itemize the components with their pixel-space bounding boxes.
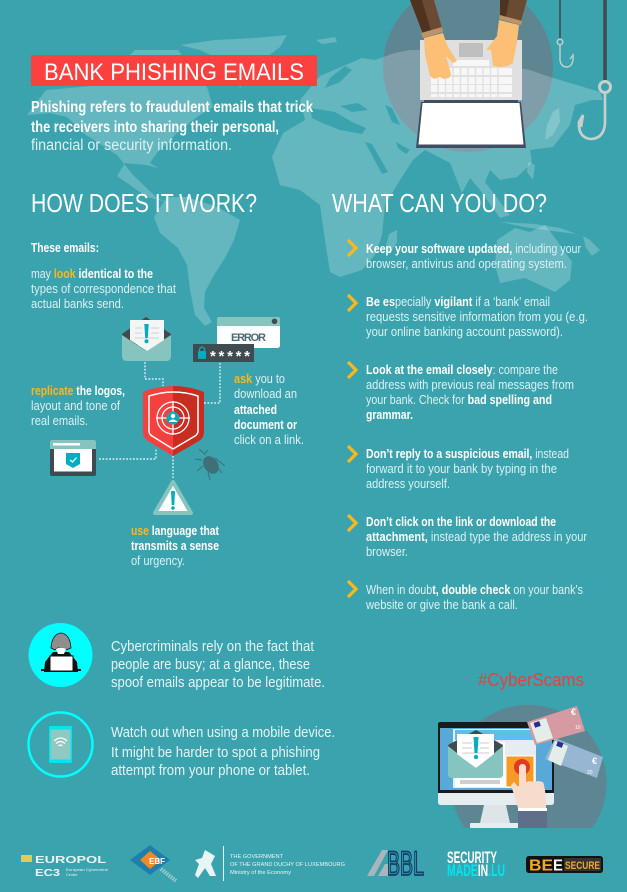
text: ask you to download: attached [234, 402, 277, 417]
advice: look at the email closely: grammar. [366, 407, 413, 422]
advice: double check: When in doubt, double check on your bank’s [366, 582, 583, 597]
text: may look identical: may look identical to the [31, 266, 153, 281]
text: ask you to download: click on a link. [234, 432, 304, 447]
heading: what can you do: WHAT CAN YOU DO? [332, 188, 547, 218]
logo: Government of Luxembourg: Ministry of the Economy [230, 870, 291, 876]
icon: envelope with alert [122, 317, 171, 361]
text: use language: transmits a sense [131, 538, 219, 553]
icon: hacker in cyan circle [28, 623, 92, 687]
icon: small fishing hook [557, 0, 573, 67]
logo: Europol EC3: EUROPOL [35, 854, 107, 866]
advice: do not click: attachment, instead type the address in your [366, 529, 588, 544]
icon: warning triangle [155, 482, 191, 513]
text: mobile warning: Watch out when using a mobile device. [111, 724, 335, 741]
text: may look identical: actual banks send. [31, 296, 124, 311]
advice: keep software updated: browser, antivirus and operating system. [366, 256, 567, 271]
advice: be vigilant [366, 294, 588, 339]
advice: be vigilant: Be especially vigilant if a ‘bank’ email [366, 294, 550, 309]
text: ask you to download: document or [234, 417, 297, 432]
logo: Europol EC3: Centre [66, 873, 77, 877]
illustration: computer with email and banknotes [438, 705, 606, 828]
text: replicate the logos [31, 383, 125, 428]
text: mobile warning [111, 724, 335, 779]
text: mobile warning: It might be harder to spot a phishing [111, 744, 320, 761]
icon: shield with target [143, 386, 204, 456]
logo: Europol EC3: EC3 [35, 868, 61, 879]
advice: do not reply: forward it to your bank by typing in the [366, 461, 557, 476]
advice: be vigilant: your online banking account password). [366, 324, 563, 339]
logo: Government of Luxembourg [195, 846, 345, 881]
text: cybercriminals [111, 638, 325, 691]
text: use language: use language that [131, 523, 219, 538]
advice: do not click [366, 514, 588, 559]
intro text: financial or security information. [31, 137, 232, 154]
text: may look identical [31, 266, 176, 311]
logo: Government of Luxembourg: OF THE GRAND DUCHY OF LUXEMBOURG [230, 862, 345, 868]
text: replicate the logos: layout and tone of [31, 398, 120, 413]
advice: do not reply [366, 446, 569, 491]
advice chevrons [348, 240, 356, 597]
illustration: computer with email and banknotes: 10 [575, 725, 581, 731]
icon: large fishing hook [579, 0, 610, 139]
intro text: Phishing refers to fraudulent emails that trick [31, 99, 313, 116]
heading: how does it work: HOW DOES IT WORK? [31, 188, 257, 218]
advice: look at the email closely: address with previous real messages from [366, 377, 574, 392]
advice: keep software updated: Keep your software updated, including your [366, 241, 581, 256]
dotted connectors [99, 362, 220, 478]
icon: error window with password bar: ***** [210, 348, 250, 365]
logo: Security Made In LU: MADEIN.LU [447, 862, 505, 880]
text: replicate the logos: replicate the logos, [31, 383, 125, 398]
advice: do not reply: address yourself. [366, 476, 450, 491]
text: cybercriminals: Cybercriminals rely on the fact that [111, 638, 315, 655]
advice: do not click: browser. [366, 544, 408, 559]
advice: look at the email closely: Look at the email closely: compare the [366, 362, 558, 377]
logo: Government of Luxembourg: THE GOVERNMENT [230, 854, 284, 860]
advice: be vigilant: requests sensitive information from you (e.g. [366, 309, 588, 324]
illustration: computer with email and banknotes: 20 [587, 770, 593, 776]
logo: ABBL [367, 845, 424, 883]
advice: look at the email closely: your bank. Check for bad spelling and [366, 392, 552, 407]
intro text [31, 99, 313, 154]
icon: bug [195, 449, 225, 480]
illustration: computer with email and banknotes: € [592, 756, 597, 766]
laptop backdrop circle [383, 0, 553, 152]
text: these emails: These emails: [31, 240, 99, 255]
logo: EBF: EBF [149, 857, 165, 866]
advice: do not reply: Don’t reply to a suspicious email, instead [366, 446, 569, 461]
advice: keep software updated [366, 241, 581, 271]
advice: double check: website or give the bank a call. [365, 597, 518, 612]
logo: Bee Secure: E [553, 858, 563, 874]
logo: Security Made In LU: SECURITY [447, 849, 497, 867]
title banner: BANK PHISHING EMAILS [44, 59, 304, 86]
logo: Bee Secure: BE [529, 858, 553, 874]
inland seas cut into the map [310, 66, 410, 174]
text: ask you to download: ask you to [234, 371, 285, 386]
icon: error window with password bar: ERROR [231, 332, 266, 344]
logo: ABBL: BBL [387, 845, 424, 883]
text: ask you to download [234, 371, 304, 447]
illustration: computer with email and banknotes: € [571, 707, 576, 717]
advice: look at the email closely [366, 362, 574, 422]
text: use language [131, 523, 219, 568]
text: may look identical: types of correspondence that [31, 281, 176, 296]
icon: browser window with shield [50, 440, 96, 476]
world map [27, 35, 603, 326]
text: use language: of urgency. [131, 553, 185, 568]
text: cybercriminals: spoof emails appear to be legitimate. [111, 674, 325, 691]
logo: EBF [130, 845, 176, 881]
logo: Security Made In LU [447, 849, 505, 880]
hashtag: #CyberScams [478, 670, 584, 690]
icon: laptop with hands [410, 0, 527, 148]
logo: Bee Secure: SECURE [565, 860, 600, 872]
text: ask you to download: download an [234, 386, 297, 401]
advice: do not click: Don’t click on the link or download the [366, 514, 556, 529]
text: mobile warning: attempt from your phone or tablet. [111, 762, 310, 779]
intro text: the receivers into sharing their personal, [31, 119, 279, 136]
text: replicate the logos: real emails. [31, 413, 88, 428]
icon: mobile phone in ring [28, 712, 92, 776]
advice: double check [365, 582, 583, 612]
logo: Bee Secure [526, 856, 603, 874]
logo: Europol EC3 [21, 854, 108, 879]
logo: Europol EC3: European Cybercrime [66, 868, 108, 872]
text: cybercriminals: people are busy; at a glance, these [111, 656, 310, 673]
icon: error window with password bar [193, 317, 280, 365]
